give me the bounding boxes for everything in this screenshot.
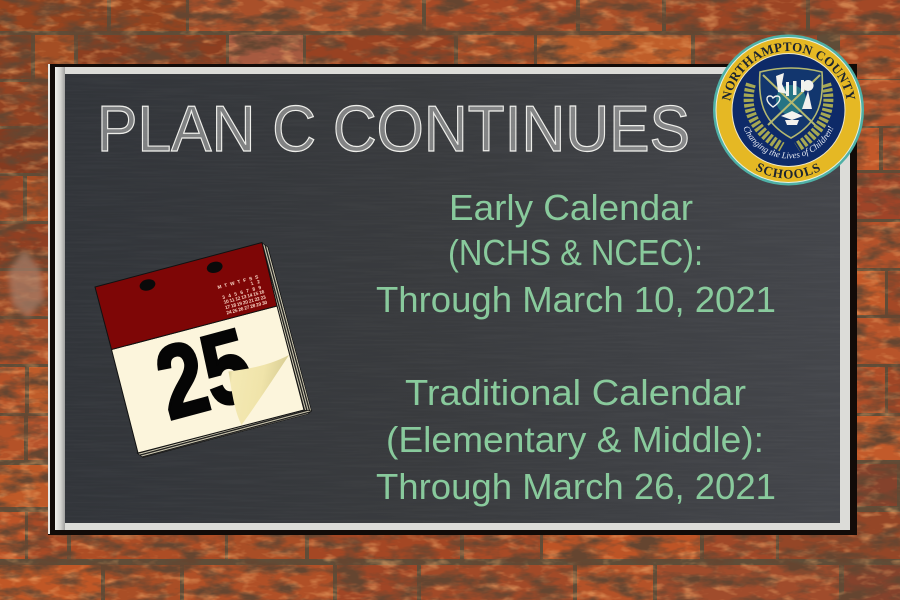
early calendar text: [376, 187, 776, 320]
seal inner disc: [732, 54, 844, 166]
chalkboard surface: [65, 74, 840, 523]
early calendar text: Through March 10, 2021: [376, 279, 776, 320]
seal schools text: SCHOOLS: [756, 163, 820, 179]
traditional calendar text: (Elementary & Middle):: [386, 419, 764, 460]
logo: Northampton County Schools seal: [713, 34, 864, 186]
traditional calendar text: Through March 26, 2021: [376, 466, 776, 507]
mini month grid: 17 18 19 20 21 22 23: [224, 294, 267, 311]
seal motto: Changing the Lives of Children!: [744, 126, 834, 158]
big date number: 25: [145, 306, 264, 441]
mini month grid: 24 25 26 27 28 29 30: [226, 300, 268, 316]
chalkboard frame: [48, 64, 857, 535]
torch shape: [802, 80, 814, 109]
early calendar text: Early Calendar: [449, 187, 693, 228]
seal name text: NORTHAMPTON COUNTY: [722, 42, 856, 102]
binding holes: [138, 260, 224, 292]
early calendar text: (NCHS & NCEC):: [448, 232, 703, 273]
shield: [760, 68, 822, 138]
mini month grid: [217, 274, 268, 317]
heart: [767, 96, 780, 107]
calendar page: [112, 306, 304, 453]
family figures: [776, 73, 804, 96]
graduation cap: [781, 111, 803, 125]
shield glow: [776, 85, 806, 115]
mini month grid: 1 2: [250, 279, 261, 287]
icon: tear-off calendar: [95, 242, 312, 458]
calendar red header: [95, 242, 277, 350]
calendar page stack: [137, 243, 312, 458]
laurel branches: [749, 84, 828, 147]
shield cross: [763, 75, 820, 125]
traditional calendar text: [376, 372, 776, 507]
mini month grid: 10 11 12 13 14 15 16: [223, 289, 265, 306]
traditional calendar text: Traditional Calendar: [405, 372, 746, 413]
mini month grid: 3 4 5 6 7 8 9: [222, 285, 262, 301]
mini month grid: M T W T F S S: [217, 274, 260, 291]
title: PLAN C CONTINUES: [97, 92, 690, 165]
page curl: [228, 355, 289, 425]
